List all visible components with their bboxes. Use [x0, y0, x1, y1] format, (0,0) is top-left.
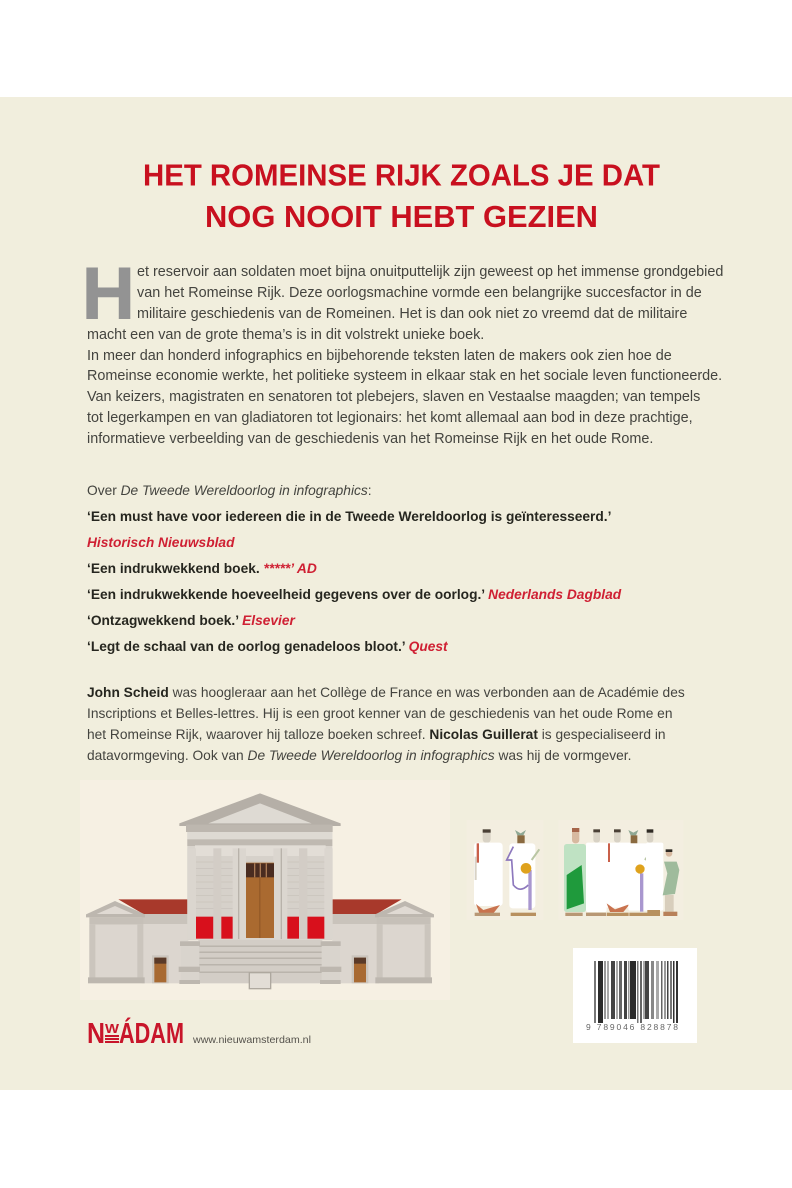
- intro text: Van keizers, magistraten en senatoren tot plebejers, slaven en Vestaalse maagden; van tempels: [87, 389, 700, 405]
- author bios: John Scheid was hoogleraar aan het Collège de France en was verbonden aan de Académie des: [87, 685, 685, 700]
- drop cap: H: [82, 254, 135, 334]
- figure group: [564, 828, 679, 916]
- author bios: [87, 685, 685, 763]
- title: [143, 158, 660, 234]
- reviews: [87, 483, 622, 654]
- reviews: ‘Legt de schaal van de oorlog genadeloos bloot.’ Quest: [87, 639, 449, 654]
- intro text: informatieve verbeelding van de geschiedenis van het Romeinse Rijk en het oude Rome.: [87, 431, 653, 447]
- website url: www.nieuwamsterdam.nl: [192, 1034, 311, 1046]
- title: NOG NOOIT HEBT GEZIEN: [205, 200, 598, 234]
- reviews: ‘Een must have voor iedereen die in de Tweede Wereldoorlog is geïnteresseerd.’: [87, 509, 611, 524]
- intro text: In meer dan honderd infographics en bijbehorende teksten laten de makers ook zien hoe de: [87, 348, 672, 364]
- reviews: ‘Een indrukwekkende hoeveelheid gegevens over de oorlog.’ Nederlands Dagblad: [87, 587, 622, 602]
- author bios: datavormgeving. Ook van De Tweede Wereldoorlog in infographics was hij de vormgever.: [87, 748, 631, 763]
- illustration: Roman figures: [467, 820, 683, 920]
- intro text: [87, 264, 723, 447]
- barcode: [573, 948, 697, 1043]
- reviews: ‘Ontzagwekkend boek.’ Elsevier: [87, 613, 296, 628]
- intro text: macht een van de grote thema’s is in dit volstrekt unieke boek.: [87, 327, 484, 343]
- intro text: van het Romeinse Rijk. Deze oorlogsmachine vormde een belangrijke succesfactor in de: [137, 285, 702, 301]
- publisher logo: W: [105, 1021, 120, 1036]
- temple front: [179, 793, 341, 940]
- right wing: [332, 899, 434, 983]
- steps: [179, 940, 341, 989]
- intro text: tot legerkampen en van gladiatoren tot legionairs: het komt allemaal aan bod in deze prachtige,: [87, 410, 693, 426]
- intro text: Romeinse economie werkte, het politieke systeem in elkaar stak en het sociale leven functioneerde.: [87, 368, 722, 384]
- illustration: Roman temple: [80, 780, 450, 1000]
- publisher logo: ÁDAM: [119, 1016, 184, 1050]
- title: HET ROMEINSE RIJK ZOALS JE DAT: [143, 158, 660, 192]
- barcode: 9 789046 828878: [586, 1022, 678, 1032]
- author bios: Inscriptions et Belles-lettres. Hij is een groot kenner van de geschiedenis van het oude Rome en: [87, 706, 672, 721]
- reviews: Over De Tweede Wereldoorlog in infographics:: [87, 483, 372, 498]
- author bios: het Romeinse Rijk, waarover hij talloze boeken schreef. Nicolas Guillerat is gespecialiseerd in: [87, 727, 666, 742]
- figure pair: [474, 829, 539, 916]
- publisher logo: N: [87, 1018, 105, 1050]
- reviews: Historisch Nieuwsblad: [87, 535, 235, 550]
- intro text: et reservoir aan soldaten moet bijna onuitputtelijk zijn geweest op het immense grondgebied: [137, 264, 723, 280]
- left wing: [86, 899, 188, 983]
- reviews: ‘Een indrukwekkend boek. *****’ AD: [87, 561, 317, 576]
- publisher logo: [87, 1016, 184, 1050]
- intro text: militaire geschiedenis van de Romeinen. Het is dan ook niet zo vreemd dat de militaire: [137, 306, 687, 322]
